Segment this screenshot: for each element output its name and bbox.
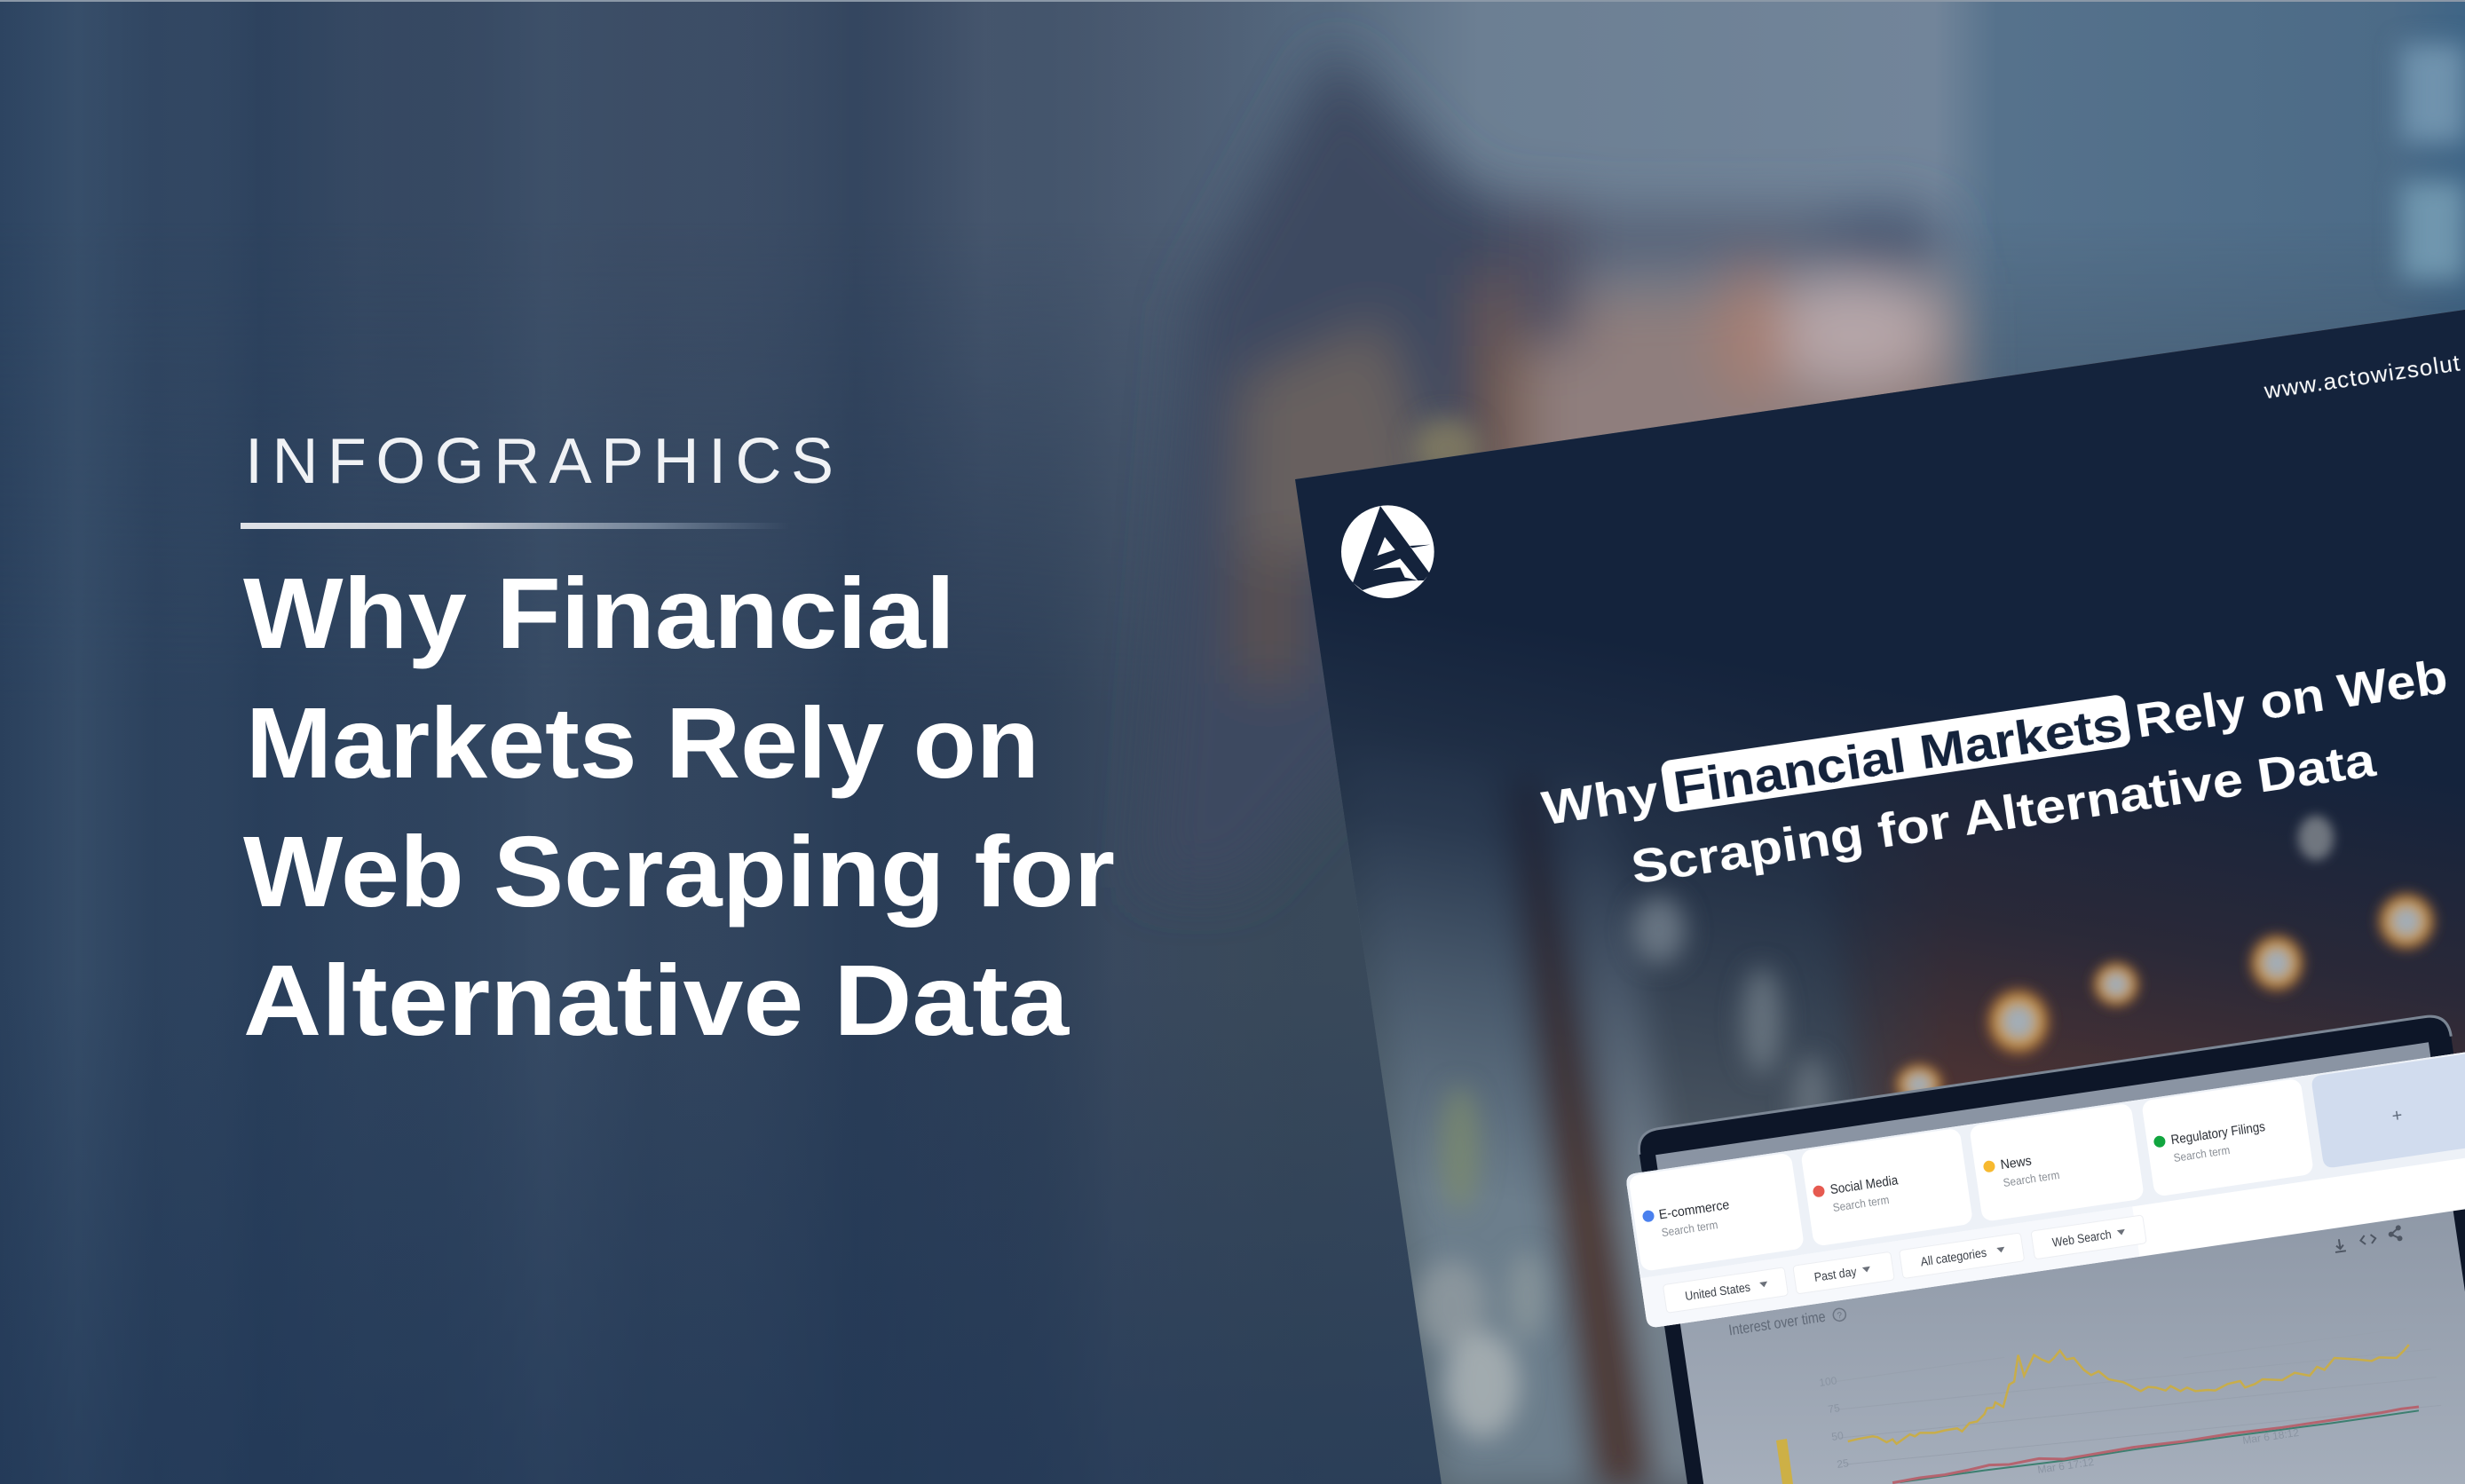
- eyebrow label: INFOGRAPHICS: INFOGRAPHICS: [245, 426, 834, 497]
- panel heading: Why: [1538, 766, 1663, 835]
- panel heading: Rely on Web: [2132, 650, 2451, 748]
- laptop screen: [1655, 1042, 2465, 1484]
- main title: [243, 557, 1115, 1056]
- divider rule under eyebrow: [241, 523, 791, 529]
- laptop body: [1639, 1016, 2465, 1484]
- filter chip: Web Search: [2031, 1215, 2146, 1259]
- search tile: News: [1969, 1102, 2145, 1222]
- icon: Actowiz logo: [1341, 505, 1434, 598]
- panel heading: Scraping for Alternative Data: [1628, 733, 2380, 895]
- add-term plus sign: +: [2390, 1106, 2404, 1126]
- search tile: E-commerce: Search term: [1661, 1218, 1718, 1239]
- search tile: News: Search term: [2003, 1168, 2060, 1189]
- line chart: interest over time: Mar 6 18:12: [2241, 1426, 2300, 1447]
- filter chip: United States: [1663, 1267, 1789, 1313]
- filter chip: All categories: All categories: [1919, 1245, 1987, 1268]
- line chart: interest over time: 75: [1827, 1401, 1841, 1416]
- main title: Markets Rely on: [246, 687, 1039, 799]
- line chart: interest over time: Mar 6 17:12: [2036, 1456, 2095, 1476]
- search tile: Social Media: Social Media: [1829, 1172, 1900, 1197]
- chart title and help icon: ?: [1837, 1311, 1844, 1322]
- search tile: Social Media: [1800, 1128, 1973, 1247]
- panel overlay: navy fade: [1295, 310, 2465, 1484]
- search tile: News: News: [2000, 1153, 2033, 1172]
- main title: Alternative Data: [243, 944, 1070, 1056]
- search tile: Regulatory Filings: [2141, 1078, 2314, 1197]
- panel header content: [1496, 349, 2465, 906]
- filter chip: Web Search: Web Search: [2051, 1227, 2113, 1250]
- filter chip: All categories: [1900, 1233, 2025, 1279]
- search tile: Regulatory Filings: Regulatory Filings: [2170, 1119, 2266, 1148]
- filter chip: United States: United States: [1684, 1280, 1751, 1303]
- website url: www.actowizsolut: [2262, 349, 2462, 404]
- filter chip: Past day: [1793, 1251, 1894, 1294]
- laptop bezel highlight: [1639, 1016, 2451, 1155]
- line chart: interest over time: [1776, 1344, 2420, 1484]
- heading highlight pill: [1660, 694, 2131, 813]
- search tile: E-commerce: E-commerce: [1658, 1197, 1730, 1222]
- line chart: interest over time: 100: [1818, 1374, 1838, 1389]
- line chart: interest over time: 50: [1830, 1429, 1845, 1443]
- search tile: E-commerce: [1628, 1152, 1805, 1272]
- add-term tile: [2312, 1054, 2465, 1167]
- panel lights and highlights: [1416, 816, 2440, 1438]
- search tile: Regulatory Filings: Search term: [2173, 1143, 2231, 1164]
- search tile: Social Media: Search term: [1832, 1193, 1890, 1214]
- search card: [1626, 1053, 2465, 1327]
- main title: Why Financial: [243, 557, 955, 669]
- chart toolbar icons: [2333, 1226, 2402, 1252]
- filter chip: Past day: Past day: [1813, 1264, 1858, 1284]
- chart title and help icon: Interest over time: [1727, 1308, 1827, 1338]
- panel heading: [1538, 647, 2461, 906]
- panel heading: Financial Markets: [1671, 698, 2126, 816]
- panel: tilted infographic preview: [1295, 310, 2465, 1484]
- search tiles and filters: [1628, 1064, 2415, 1315]
- main title: Web Scraping for: [243, 816, 1115, 928]
- line chart: interest over time: 25: [1836, 1456, 1850, 1471]
- panel photo: blurred cafe scene: [1382, 799, 1864, 1484]
